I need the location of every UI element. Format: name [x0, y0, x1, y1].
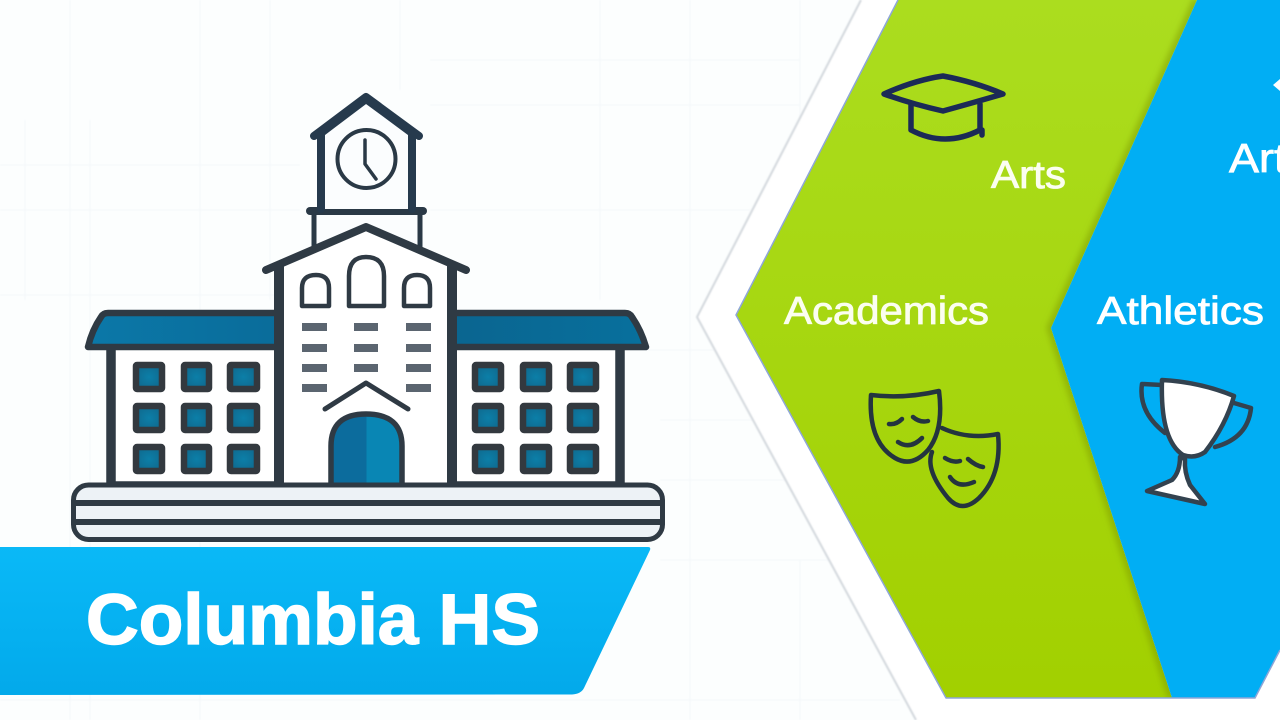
icon: partial white arrow	[1273, 79, 1280, 91]
sub-element: entrance pediment	[325, 383, 408, 409]
sub-element: striped base	[74, 485, 662, 540]
sub-element: clock tower	[314, 97, 419, 209]
icon: graduation cap	[884, 76, 1003, 139]
sub-element: arched door	[331, 414, 402, 486]
icon: trophy	[1141, 380, 1251, 504]
illustration: school building	[74, 97, 662, 540]
sub-element: right wing windows	[475, 365, 596, 471]
text: Academics label: Academics	[784, 290, 989, 333]
sub-element: arched windows	[302, 257, 430, 306]
sub-element: tower lower section	[310, 211, 423, 251]
icon: clock face	[338, 130, 396, 188]
sub-element: horizontal wall slats	[302, 323, 431, 392]
panel: white chevron backing	[696, 0, 1280, 720]
banner: Columbia HS	[0, 547, 650, 695]
text: Athletics label: Athletics	[1097, 290, 1264, 333]
title: Columbia HS	[86, 581, 540, 660]
panel: blue Athletics chevron	[1051, 0, 1280, 698]
icon: theater masks	[871, 391, 999, 506]
sub-element: central hall	[266, 227, 466, 486]
panel: green Academics and Arts chevron	[736, 0, 1197, 698]
sub-element: right wing	[452, 313, 646, 486]
sub-element: left wing windows	[136, 365, 257, 471]
sub-element: left wing	[88, 313, 281, 486]
text: Arts label: Arts	[991, 154, 1066, 197]
